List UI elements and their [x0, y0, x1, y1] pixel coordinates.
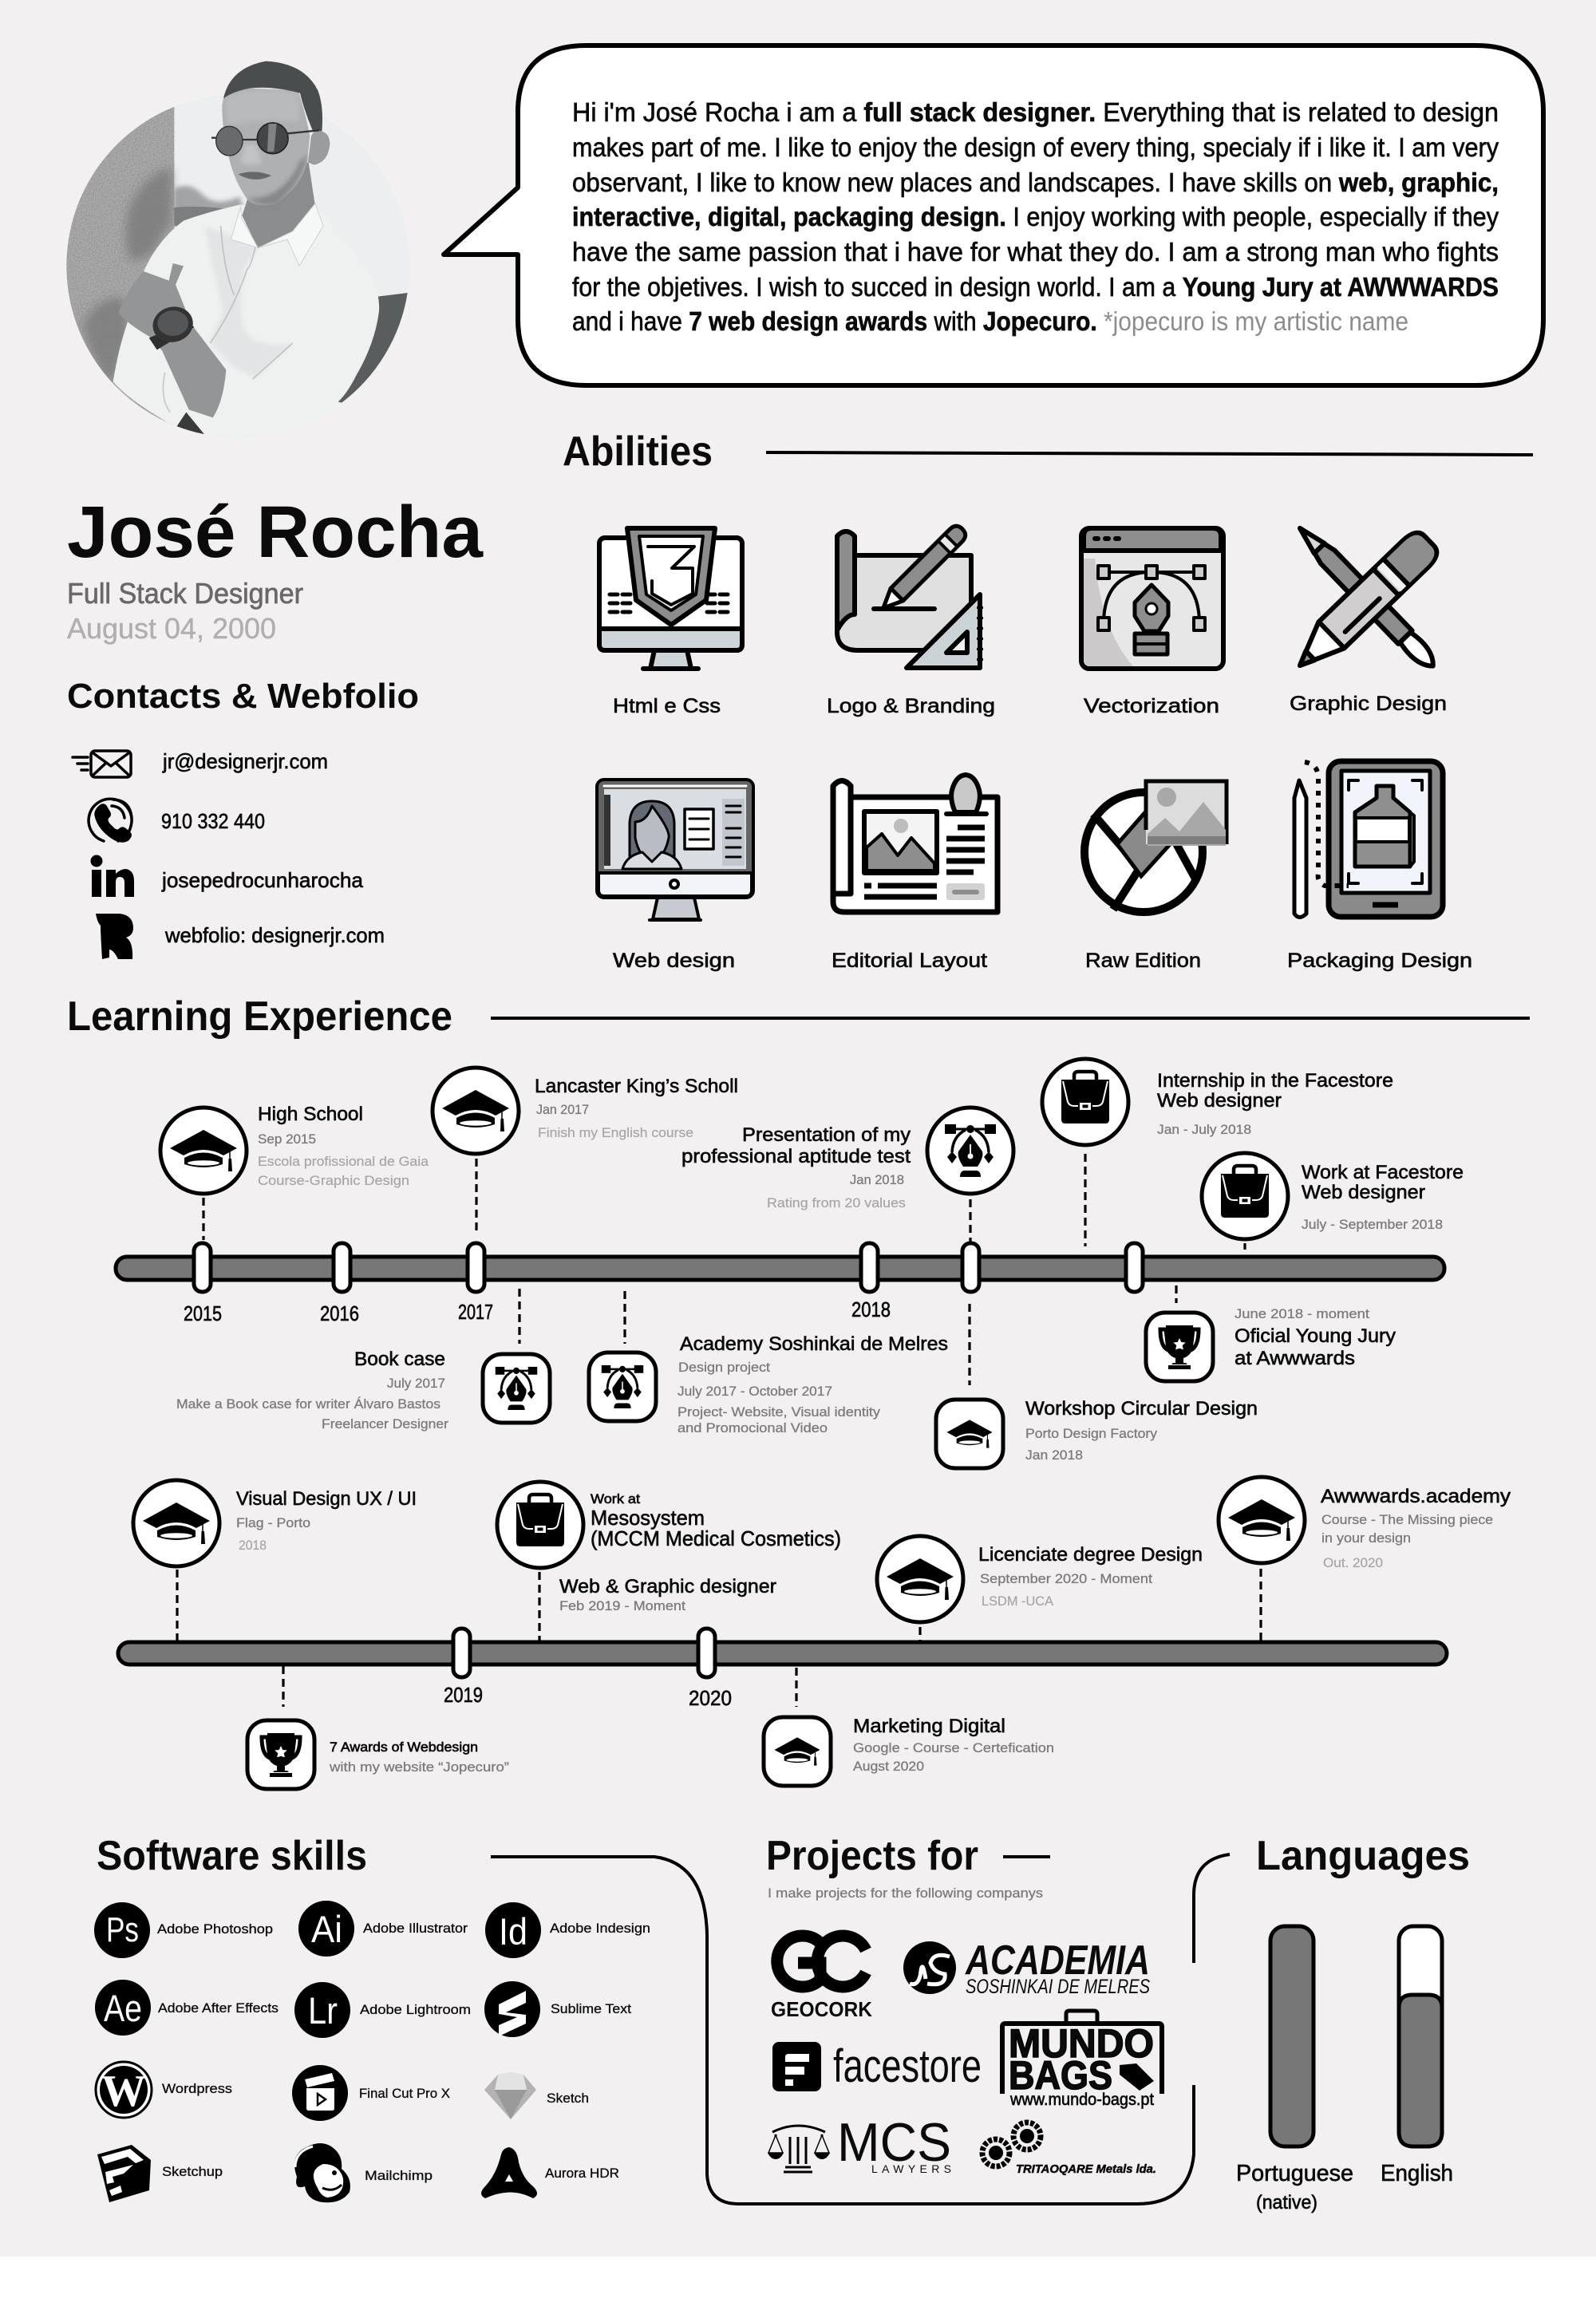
- icon: pen tool: [483, 1354, 550, 1423]
- phone number: 910 332 440: [161, 809, 265, 833]
- ability: logo and branding: [827, 523, 995, 717]
- event: work at facestore: [1202, 1153, 1464, 1239]
- event text: [258, 1104, 429, 1188]
- bubble text: [572, 97, 1499, 336]
- logos: [768, 1936, 1162, 2176]
- bar: english: [1381, 1926, 1453, 2186]
- icon: graduation cap: [877, 1536, 963, 1622]
- year pills: [453, 1629, 715, 1677]
- event text: [559, 1492, 841, 1613]
- webfolio: webfolio: designerjr.com: [164, 923, 385, 947]
- bubble text: interactive, digital, packaging design. I enjoy working with people, especially if they: [572, 202, 1499, 231]
- skill: wordpress: [96, 2062, 232, 2118]
- label: Raw Edition: [1085, 950, 1201, 972]
- bubble text: makes part of me. I like to enjoy the design of every thing, specialy if i like it. I am very: [572, 132, 1499, 162]
- event text: Feb 2019 - Moment: [559, 1599, 685, 1613]
- event text: [678, 1333, 948, 1435]
- skill: aurora hdr: [481, 2147, 619, 2198]
- event text: Academy Soshinkai de Melres: [680, 1333, 948, 1355]
- profile photo: [64, 61, 415, 439]
- skill: mailchimp: Mailchimp: [365, 2168, 433, 2183]
- label: Packaging Design: [1287, 950, 1472, 972]
- icon: graduation cap: [936, 1400, 1003, 1468]
- bubble text: have the same passion that i have for what they do. I am a strong man who fights: [572, 237, 1499, 267]
- learning experience heading: Learning Experience: [67, 993, 452, 1040]
- event text: [978, 1544, 1203, 1609]
- icon: graduation cap: [133, 1480, 219, 1566]
- skill: after effects: [95, 1980, 279, 2036]
- event text: 7 Awards of Webdesign: [330, 1739, 478, 1755]
- event: awwwards academy: [1219, 1477, 1511, 1570]
- event text: Marketing Digital: [853, 1716, 1005, 1737]
- event text: [1025, 1398, 1258, 1463]
- event: marketing digital: [764, 1716, 1054, 1786]
- event text: Web & Graphic designer: [559, 1576, 776, 1597]
- bubble text: and i have 7 web design awards with Jopecuro. *jopecuro is my artistic name: [572, 306, 1408, 336]
- logo: gears: TRITAOQARE Metals lda.: [1016, 2162, 1156, 2176]
- speech bubble: [444, 45, 1543, 385]
- skill: illustrator: [298, 1901, 468, 1957]
- event text: Visual Design UX / UI: [236, 1488, 417, 1510]
- logo: mcs lawyers: [768, 2112, 951, 2175]
- role: Full Stack Designer: [67, 577, 303, 610]
- event text: Make a Book case for writer Álvaro Bastos: [176, 1396, 440, 1412]
- icon: linkedin: [91, 855, 134, 897]
- logo: facestore: [772, 2040, 982, 2092]
- event text: in your design: [1321, 1530, 1411, 1546]
- event text: Sep 2015: [258, 1132, 316, 1147]
- event text: Project- Website, Visual identity: [678, 1404, 881, 1420]
- projects subtitle: I make projects for the following companys: [768, 1886, 1043, 1901]
- event: high school: [160, 1104, 429, 1194]
- event text: Lancaster King’s Scholl: [535, 1076, 738, 1097]
- icon: css monitor: [599, 528, 742, 669]
- ability: raw edition: [1084, 781, 1227, 972]
- event text: [236, 1488, 417, 1553]
- skill: wordpress: Wordpress: [162, 2081, 232, 2096]
- skill: sketchup: Sketchup: [162, 2164, 223, 2179]
- name heading: José Rocha: [67, 492, 484, 573]
- skill: photoshop: [94, 1902, 273, 1958]
- event text: Workshop Circular Design: [1025, 1398, 1258, 1420]
- skill: lightroom: [294, 1982, 471, 2038]
- icon: trophy: [247, 1720, 314, 1789]
- email: jr@designerjr.com: [162, 749, 328, 773]
- event text: Oficial Young Jury: [1235, 1325, 1396, 1347]
- event text: Jan - July 2018: [1157, 1123, 1251, 1137]
- event text: [853, 1716, 1054, 1774]
- icon: trophy: [1146, 1313, 1213, 1381]
- event text: at Awwwards: [1235, 1348, 1355, 1369]
- skill: final cut: Final Cut Pro X: [359, 2086, 450, 2101]
- skill: sketchup: [97, 2145, 223, 2202]
- logo: mcs lawyers: LAWYERS: [871, 2162, 951, 2175]
- icon: pen tool: [927, 1108, 1013, 1194]
- skill: indesign: Id: [499, 1910, 527, 1953]
- event text: Rating from 20 values: [767, 1195, 906, 1210]
- event text: June 2018 - moment: [1235, 1307, 1369, 1321]
- icon: mail: [73, 751, 131, 777]
- event: academy: [589, 1333, 948, 1435]
- event: awards: [247, 1720, 509, 1789]
- ability: html e css: [599, 528, 742, 717]
- year labels: 2018: [851, 1297, 891, 1321]
- skill: after effects: Adobe After Effects: [158, 2000, 279, 2016]
- icon: editorial sheet: [833, 775, 998, 912]
- ability: web design: [597, 780, 753, 972]
- icon: briefcase: [1202, 1153, 1288, 1239]
- logo: academia: ACADEMIA: [964, 1937, 1150, 1984]
- skill: photoshop: Adobe Photoshop: [157, 1921, 273, 1937]
- ability: vectorization: [1081, 528, 1223, 717]
- event text: Work at: [591, 1492, 640, 1507]
- event text: Book case: [354, 1349, 445, 1370]
- logo: gears: [982, 2123, 1156, 2176]
- skill: sublime text: Sublime Text: [551, 2001, 631, 2016]
- event text: Design project: [678, 1360, 770, 1375]
- skill: illustrator: Adobe Illustrator: [363, 1921, 468, 1936]
- event text: Freelancer Designer: [322, 1416, 448, 1431]
- icon: briefcase: [497, 1482, 583, 1568]
- icon: raw lens and photo: [1084, 781, 1227, 912]
- icon: webfolio mark: [96, 914, 133, 959]
- event text: Awwwards.academy: [1321, 1486, 1511, 1507]
- event text: High School: [258, 1104, 363, 1125]
- event text: [1302, 1162, 1464, 1232]
- skill: lightroom: Adobe Lightroom: [360, 2002, 471, 2017]
- label: Web design: [613, 950, 735, 972]
- year labels: 2020: [689, 1686, 732, 1710]
- skill: illustrator: Ai: [311, 1908, 342, 1950]
- ability: editorial layout: [832, 775, 998, 972]
- label: Html e Css: [613, 695, 721, 717]
- logo: geocork: GEOCORK: [771, 1997, 872, 2021]
- event text: [681, 1124, 911, 1210]
- logo: academia: SOSHINKAI DE MELRES: [966, 1976, 1150, 1998]
- label: Editorial Layout: [832, 950, 987, 972]
- icon: design monitor: [597, 780, 753, 920]
- event: internship: [1042, 1059, 1393, 1145]
- projects heading: Projects for: [766, 1833, 978, 1879]
- event text: July 2017 - October 2017: [678, 1384, 832, 1399]
- timeline 1: [116, 1154, 1444, 1385]
- event text: Work at Facestore: [1302, 1162, 1464, 1183]
- event text: Flag - Porto: [236, 1516, 310, 1530]
- skill: sketch: Sketch: [547, 2091, 589, 2106]
- bar: english: English: [1381, 2161, 1453, 2186]
- event text: Augst 2020: [853, 1759, 924, 1774]
- event text: [329, 1739, 509, 1775]
- skill: sketch: [484, 2072, 589, 2119]
- event text: Course-Graphic Design: [258, 1173, 409, 1188]
- skill: mailchimp: [294, 2143, 433, 2202]
- timeline bar: [118, 1642, 1447, 1664]
- logo: mundo bags: MUNDO: [1009, 2021, 1154, 2066]
- languages heading: Languages: [1256, 1833, 1470, 1879]
- event text: [535, 1076, 738, 1140]
- skill: indesign: Adobe Indesign: [550, 1921, 650, 1936]
- language bars: [1236, 1926, 1453, 2213]
- event text: 2018: [239, 1538, 267, 1553]
- year labels: 2016: [320, 1301, 359, 1325]
- logo: mundo bags: www.mundo-bags.pt: [1009, 2091, 1154, 2109]
- skill: after effects: Ae: [104, 1987, 142, 2029]
- event text: Presentation of my: [742, 1124, 911, 1146]
- event text: Web designer: [1157, 1090, 1282, 1112]
- event: mesosystem: [497, 1482, 841, 1613]
- event text: and Promocional Video: [678, 1420, 828, 1435]
- year labels: [184, 1297, 891, 1325]
- icon: packaging tablet: [1294, 761, 1443, 918]
- bar: portuguese: (native): [1256, 2192, 1317, 2213]
- event text: with my website “Jopecuro”: [329, 1760, 509, 1775]
- logo: facestore: facestore: [833, 2040, 982, 2092]
- bubble text: Hi i'm José Rocha i am a full stack designer. Everything that is related to design: [572, 97, 1499, 127]
- bar: portuguese: [1236, 1926, 1353, 2213]
- event text: September 2020 - Moment: [980, 1572, 1152, 1586]
- year labels: 2019: [444, 1683, 483, 1707]
- abilities heading: Abilities: [563, 428, 713, 475]
- event: lancaster: [433, 1068, 738, 1154]
- linkedin name: josepedrocunharocha: [161, 868, 364, 892]
- event text: Mesosystem: [591, 1506, 705, 1530]
- logo: mundo bags: BAGS: [1009, 2053, 1112, 2098]
- event: book case: [176, 1349, 550, 1431]
- event text: July - September 2018: [1302, 1218, 1443, 1232]
- label: Logo & Branding: [827, 695, 995, 717]
- event text: Licenciate degree Design: [978, 1544, 1203, 1566]
- event text: Jan 2017: [536, 1103, 589, 1117]
- skill: sublime text: [484, 1981, 631, 2037]
- ability: packaging design: [1287, 761, 1472, 972]
- event text: Google - Course - Certefication: [853, 1741, 1054, 1755]
- logo: mundo bags: [1002, 2011, 1162, 2109]
- event text: LSDM -UCA: [982, 1594, 1053, 1609]
- icon: graduation cap: [764, 1717, 831, 1786]
- event text: [1321, 1486, 1511, 1570]
- icon: briefcase: [1042, 1059, 1128, 1145]
- event: visual design: [133, 1480, 417, 1566]
- event text: Jan 2018: [1025, 1448, 1083, 1463]
- birth date: August 04, 2000: [67, 612, 276, 645]
- icon: pen tool: [589, 1352, 656, 1421]
- label: Graphic Design: [1290, 693, 1447, 715]
- event: licenciate: [877, 1536, 1203, 1622]
- skill: final cut: [292, 2065, 450, 2121]
- skill: photoshop: Ps: [106, 1910, 139, 1949]
- event text: July 2017: [387, 1376, 445, 1391]
- year labels: [444, 1683, 732, 1710]
- event text: (MCCM Medical Cosmetics): [591, 1526, 841, 1550]
- event: young jury: [1146, 1307, 1396, 1381]
- timeline bar: [116, 1257, 1444, 1280]
- logo: academia: [903, 1937, 1150, 1998]
- projects frame line: [491, 1854, 1230, 2204]
- icon: phone: [89, 799, 132, 841]
- skill: wordpress: W: [101, 2067, 146, 2116]
- event text: professional aptitude test: [681, 1146, 911, 1167]
- event text: Jan 2018: [850, 1173, 904, 1187]
- label: Vectorization: [1084, 695, 1219, 717]
- software list: [94, 1901, 650, 2202]
- icon: graduation cap: [160, 1108, 247, 1194]
- icon: bezier window: [1081, 528, 1223, 669]
- icon: graduation cap: [1219, 1477, 1305, 1563]
- event text: Porto Design Factory: [1025, 1427, 1158, 1441]
- event text: [176, 1349, 448, 1431]
- event text: Web designer: [1302, 1182, 1425, 1203]
- year pills: [194, 1243, 1143, 1292]
- skill: aurora hdr: Aurora HDR: [545, 2166, 619, 2181]
- icon: graduation cap: [433, 1068, 519, 1154]
- logo: mcs lawyers: MCS: [837, 2112, 951, 2173]
- icon: logo drawing: [837, 523, 980, 668]
- ability: graphic design: [1287, 522, 1447, 715]
- year labels: 2017: [458, 1300, 493, 1324]
- icon: pencil and brush: [1287, 522, 1442, 679]
- year labels: 2015: [184, 1301, 222, 1325]
- bar: portuguese: Portuguese: [1236, 2161, 1353, 2186]
- event text: Finish my English course: [538, 1125, 693, 1140]
- skill: indesign: [485, 1902, 650, 1958]
- event text: Out. 2020: [1323, 1556, 1383, 1570]
- event text: [1235, 1307, 1396, 1369]
- contacts heading: Contacts & Webfolio: [67, 677, 419, 716]
- event text: Internship in the Facestore: [1157, 1070, 1393, 1092]
- event text: Course - The Missing piece: [1321, 1512, 1493, 1527]
- event: workshop: [936, 1398, 1258, 1468]
- timeline 2: [118, 1569, 1447, 1710]
- bubble text: for the objetives. I wish to succed in design world. I am a Young Jury at AWWWARDS: [572, 272, 1499, 302]
- event text: Escola profissional de Gaia: [258, 1154, 429, 1169]
- logo: geocork: [771, 1936, 872, 2021]
- skill: lightroom: Lr: [308, 1989, 338, 2032]
- software skills heading: Software skills: [97, 1833, 367, 1879]
- bubble text: observant, I like to know new places and landscapes. I have skills on web, graphic,: [572, 168, 1499, 197]
- event text: [1157, 1070, 1393, 1137]
- event: presentation: [681, 1108, 1013, 1210]
